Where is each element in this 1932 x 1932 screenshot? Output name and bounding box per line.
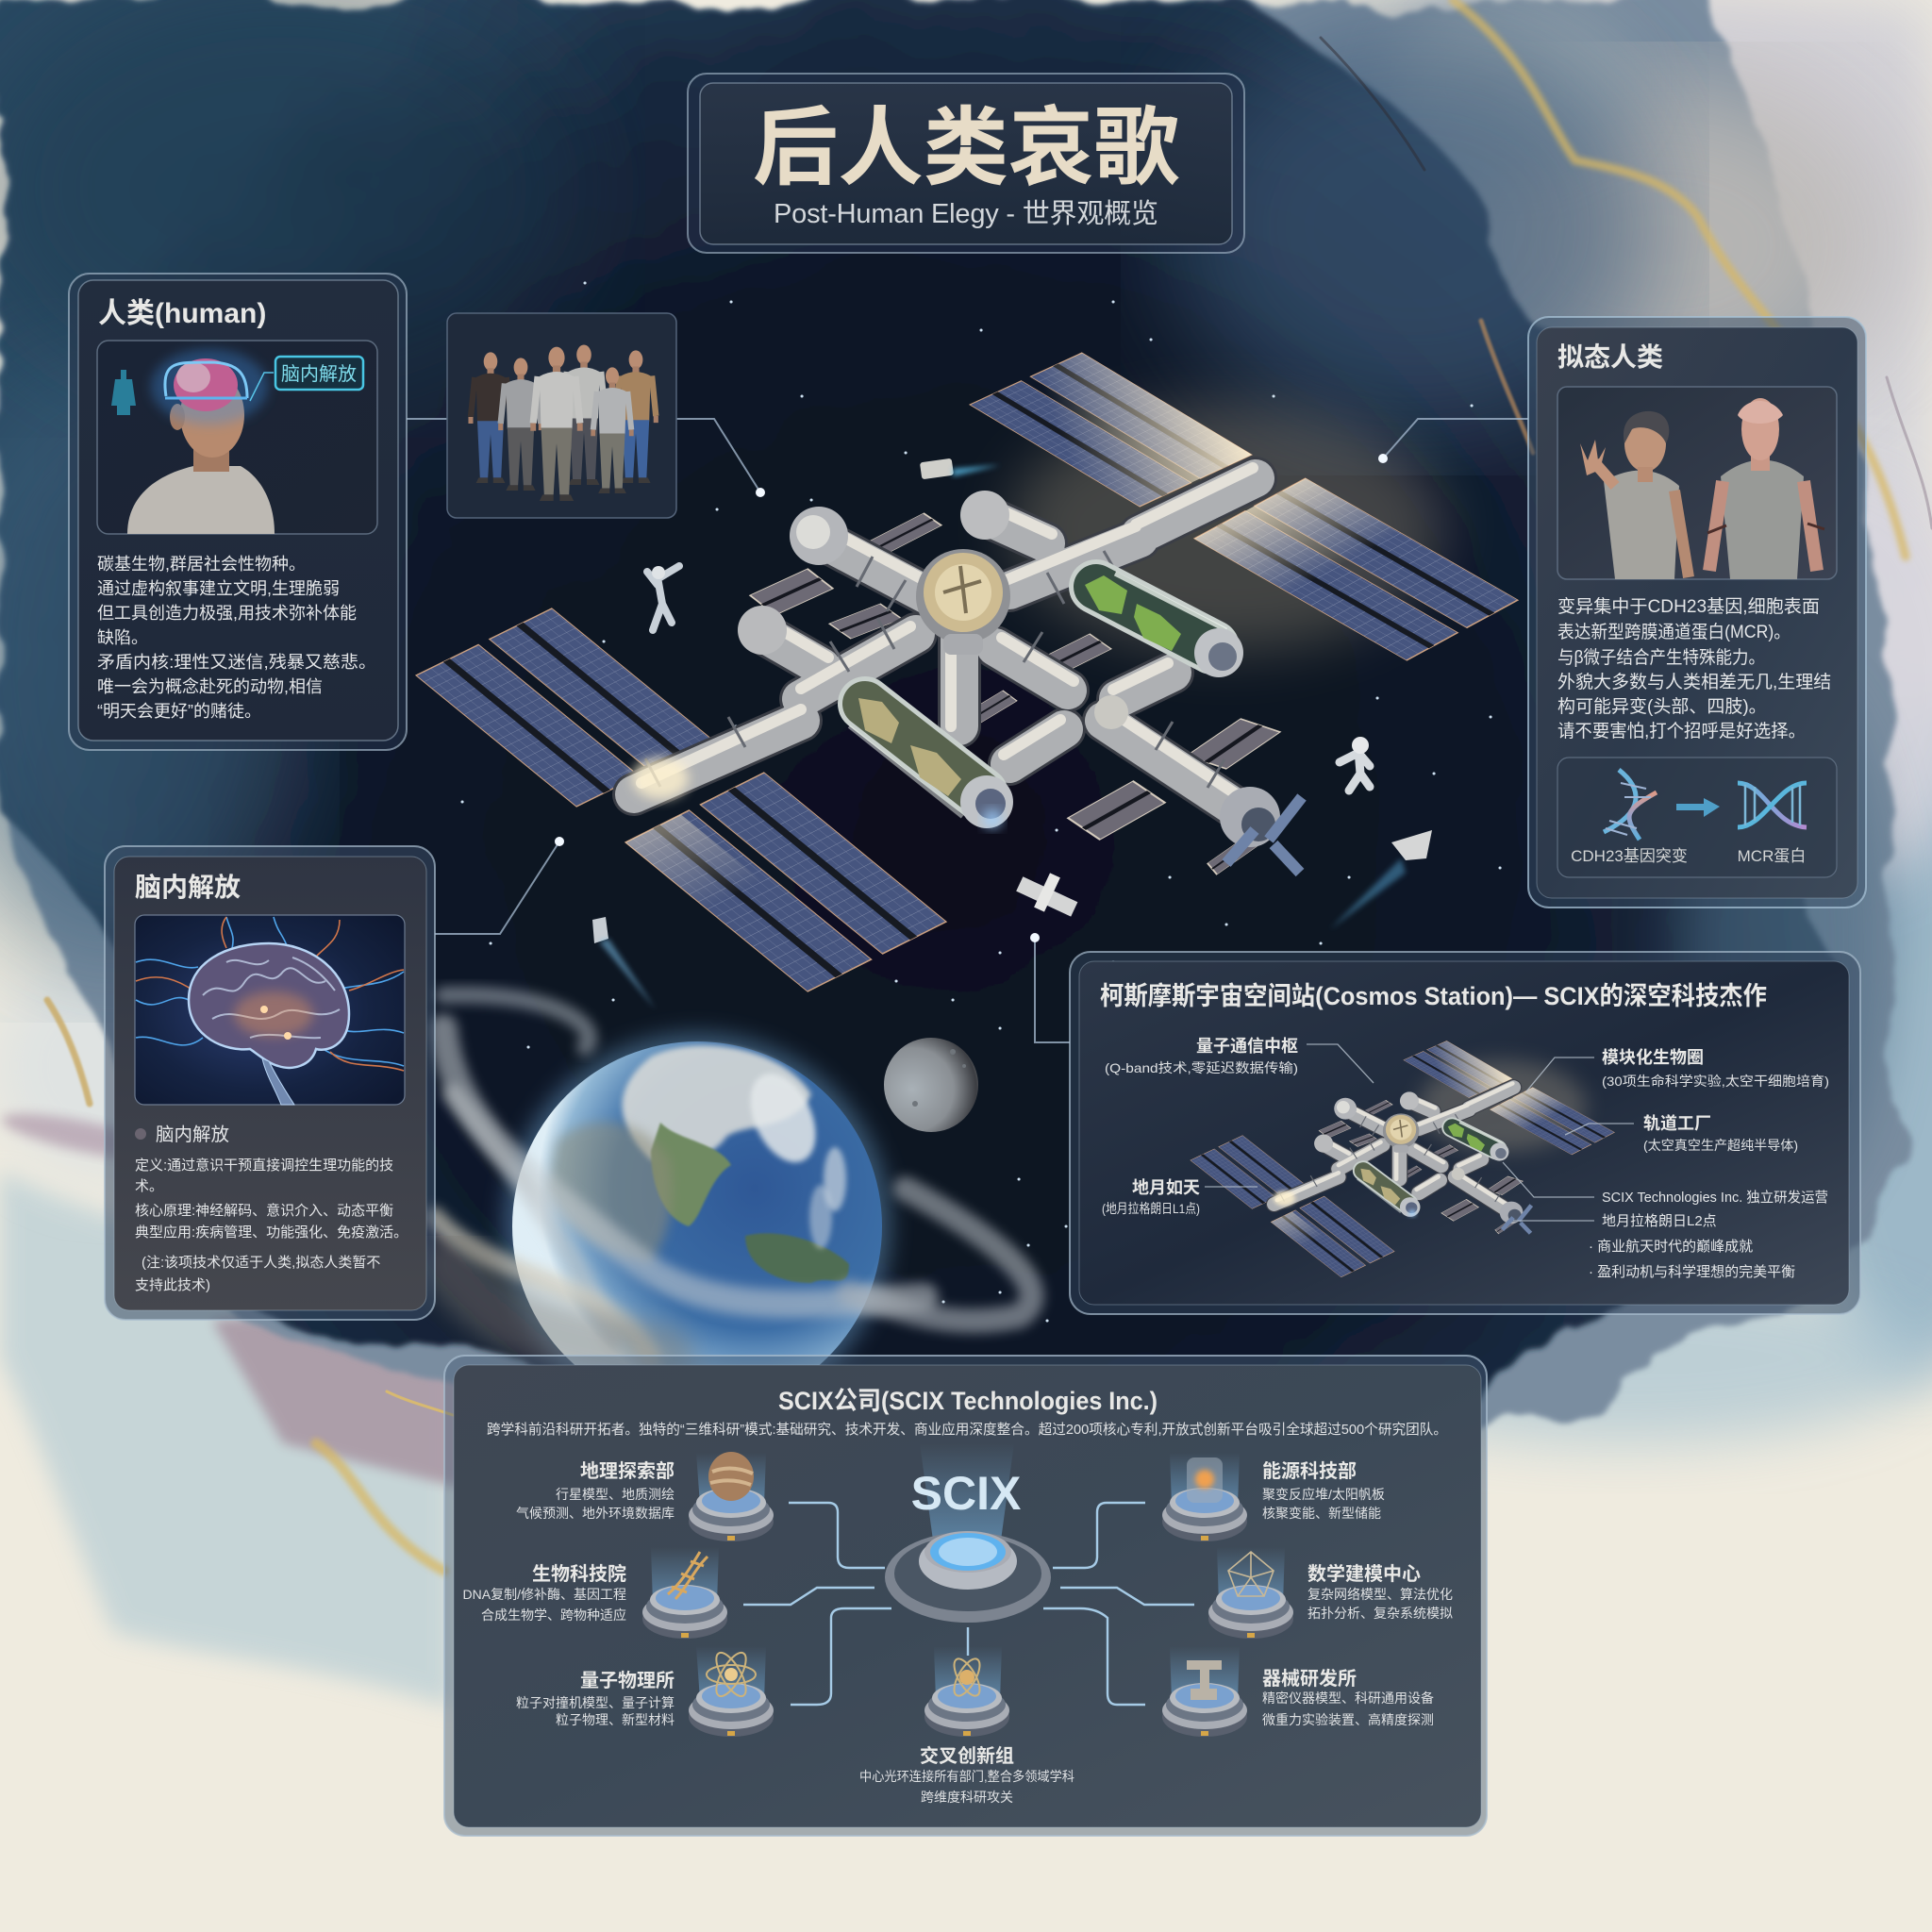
bullet list: SCIX Technologies Inc. 独立研发运营: [1602, 1190, 1828, 1206]
node connectors: [743, 1503, 1194, 1705]
figure: man 1: [471, 352, 510, 483]
astronaut right: [1340, 737, 1370, 791]
description: 缺陷。: [97, 628, 148, 647]
connector lines and dots: [407, 419, 1528, 1042]
node: energy: 核聚变能、新型储能: [1262, 1506, 1381, 1521]
definition text: 术。: [135, 1178, 163, 1194]
node: math modeling: 数学建模中心: [1307, 1563, 1421, 1585]
description: 与β微子结合产生特殊能力。: [1557, 647, 1765, 668]
cargo craft top with thruster: [920, 458, 1000, 479]
icon: reactor: [1187, 1457, 1223, 1503]
node: instruments: 精密仪器模型、科研通用设备: [1262, 1690, 1434, 1706]
heading: 人类(human): [98, 298, 266, 329]
definition text: 核心原理:神经解码、意识介入、动态平衡: [135, 1202, 393, 1219]
node: biotech: [463, 1547, 727, 1639]
icon: DNA: [1604, 770, 1657, 840]
icon: polyhedron: [1228, 1552, 1274, 1596]
heading: SCIX公司(SCIX Technologies Inc.): [778, 1387, 1158, 1415]
node: geo exploration: [516, 1452, 774, 1541]
heading: 柯斯摩斯宇宙空间站(Cosmos Station)— SCIX的深空科技杰作: [1100, 982, 1767, 1010]
description: 唯一会为概念赴死的动物,相信: [97, 676, 323, 696]
node: cross innovation: 中心光环连接所有部门,整合多领域学科: [859, 1769, 1074, 1784]
description: 表达新型跨膜通道蛋白(MCR)。: [1557, 622, 1790, 642]
definition text: (注:该项技术仅适于人类,拟态人类暂不: [142, 1255, 380, 1271]
node: biotech: 生物科技院: [532, 1562, 626, 1585]
panel: brain liberation: [105, 846, 435, 1320]
icon: DNA: [668, 1552, 708, 1599]
label: biosphere: 模块化生物圈: [1602, 1047, 1704, 1067]
node: math modeling: 拓扑分析、复杂系统模拟: [1307, 1606, 1453, 1621]
icon: atom core: [949, 1655, 985, 1700]
jet astronaut left with trail: [592, 917, 656, 1009]
node: cross innovation: 交叉创新组: [920, 1744, 1014, 1767]
description: 外貌大多数与人类相差无几,生理结: [1557, 672, 1831, 692]
description: “明天会更好”的赌徒。: [97, 702, 261, 721]
heading: 脑内解放: [135, 873, 241, 902]
node: quantum physics: [516, 1646, 774, 1737]
astronaut left: [647, 566, 679, 630]
main title: 后人类哀歌: [753, 101, 1179, 196]
label: biosphere: (30项生命科学实验,太空干细胞培育): [1602, 1074, 1829, 1089]
label: orbital factory: [1643, 1113, 1798, 1153]
brain hologram: [151, 349, 268, 425]
node: instruments: [1162, 1646, 1434, 1737]
icon: MCR protein: [1738, 783, 1807, 827]
mid-tone ring: [0, 0, 1895, 1460]
figure: woman 5: [593, 367, 631, 493]
figure: human-looking mimic waving: [1580, 411, 1689, 579]
label: quantum hub: 量子通信中枢: [1196, 1037, 1298, 1056]
icon: hologram figure: [111, 370, 136, 415]
description: 变异集中于CDH23基因,细胞表面: [1557, 596, 1820, 617]
node: quantum physics: 粒子对撞机模型、量子计算: [516, 1695, 675, 1710]
figure: woman 2: [501, 358, 541, 491]
moon: [884, 1038, 978, 1132]
image: glowing brain: [135, 915, 405, 1105]
node: energy: [1162, 1453, 1385, 1541]
mini station diagram: [1191, 1041, 1614, 1277]
node: instruments: 微重力实验装置、高精度探测: [1262, 1712, 1434, 1727]
label: earth-moon: 地月如天: [1132, 1178, 1200, 1197]
node: math modeling: 复杂网络模型、算法优化: [1307, 1587, 1453, 1602]
node: quantum physics: 粒子物理、新型材料: [556, 1712, 675, 1727]
description: 通过虚构叙事建立文明,生理脆弱: [97, 579, 340, 598]
bullet heading: 脑内解放: [156, 1124, 229, 1145]
satellite: [1016, 873, 1077, 917]
leader lines: [1205, 1044, 1634, 1221]
figure: man 3: [533, 347, 580, 501]
starfield: [462, 283, 1500, 1321]
description: [97, 555, 376, 721]
description: 碳基生物,群居社会性物种。: [97, 555, 306, 574]
gene label: CDH23基因突变: [1571, 847, 1688, 865]
arrow: [1676, 798, 1720, 817]
figure: man 6: [616, 350, 656, 483]
node: geo exploration: 地理探索部: [580, 1460, 675, 1482]
logo: SCIX: [911, 1467, 1021, 1520]
node: energy: 能源科技部: [1262, 1460, 1357, 1482]
label: quantum hub: (Q-band技术,零延迟数据传输): [1105, 1060, 1298, 1075]
node: geo exploration: 行星模型、地质测绘: [556, 1487, 675, 1502]
diagram: gene to protein: [1557, 758, 1837, 877]
space station: [416, 353, 1518, 991]
dust swirl left: [434, 995, 1032, 1358]
title panel: [688, 74, 1244, 253]
gold veins: [47, 0, 1932, 1571]
label: orbital factory: 轨道工厂: [1643, 1113, 1711, 1133]
description: 构可能异变(头部、四肢)。: [1557, 696, 1767, 717]
figure: altered mimic: [1707, 398, 1824, 579]
label: biosphere: [1602, 1047, 1829, 1089]
panel: human: [69, 274, 407, 750]
jet craft right with trail: [1330, 830, 1432, 929]
node: quantum physics: 量子物理所: [580, 1670, 675, 1691]
definition text: 典型应用:疾病管理、功能强化、免疫激活。: [135, 1224, 408, 1241]
definition text: 定义:通过意识干预直接调控生理功能的技: [135, 1157, 393, 1174]
label: earth-moon: (地月拉格朗日L1点): [1102, 1201, 1200, 1216]
central hub SCIX: [885, 1443, 1051, 1623]
node: math modeling: [1208, 1547, 1453, 1639]
dark nebula: [0, 0, 1840, 1472]
node: geo exploration: 气候预测、地外环境数据库: [516, 1506, 675, 1521]
node: cross innovation: [859, 1646, 1074, 1805]
heading: 拟态人类: [1557, 342, 1663, 372]
bullet list: [1589, 1190, 1828, 1280]
definition text: [135, 1157, 408, 1293]
panel: mimic humans: [1528, 317, 1866, 908]
panel: SCIX company: [444, 1356, 1487, 1836]
protein label: MCR蛋白: [1738, 847, 1806, 865]
description: 但工具创造力极强,用技术弥补体能: [97, 604, 357, 623]
node: biotech: DNA复制/修补酶、基因工程: [463, 1587, 626, 1602]
bullet list: 地月拉格朗日L2点: [1602, 1213, 1717, 1229]
node: instruments: 器械研发所: [1262, 1668, 1357, 1690]
figure: man 4: [562, 345, 606, 485]
definition text: 支持此技术): [135, 1277, 210, 1293]
callout: 脑内解放: [281, 363, 357, 385]
planet: earth and swirling clouds: [434, 995, 1032, 1420]
icon: planet: [708, 1452, 754, 1501]
panel: human group: [447, 313, 676, 518]
panel: cosmos station: [1070, 952, 1860, 1314]
node: energy: 聚变反应堆/太阳帆板: [1262, 1487, 1385, 1502]
description: 请不要害怕,打个招呼是好选择。: [1557, 721, 1806, 741]
description: [1557, 596, 1831, 741]
callout: [250, 357, 363, 401]
icon: machine: [1187, 1660, 1222, 1700]
bullet list: · 盈利动机与科学理想的完美平衡: [1589, 1264, 1795, 1280]
node: cross innovation: 跨维度科研攻关: [921, 1790, 1013, 1805]
label: earth-moon: [1102, 1178, 1200, 1216]
intro: 跨学科前沿科研开拓者。独特的“三维科研”模式:基础研究、技术开发、商业应用深度整合。超过200项核心专利,开放式创新平台吸引全球超过500个研究团队。: [487, 1421, 1447, 1438]
label: quantum hub: [1105, 1037, 1298, 1075]
image: mimic humans: [1557, 387, 1837, 579]
icon: atom: [707, 1648, 756, 1701]
subtitle: Post-Human Elegy - 世界观概览: [774, 198, 1158, 229]
description: 矛盾内核:理性又迷信,残暴又慈悲。: [97, 653, 376, 672]
node: biotech: 合成生物学、跨物种适应: [481, 1607, 626, 1623]
image: human portrait with brain implant: [97, 341, 377, 534]
bullet list: · 商业航天时代的巅峰成就: [1589, 1239, 1753, 1255]
label: orbital factory: (太空真空生产超纯半导体): [1643, 1138, 1798, 1153]
